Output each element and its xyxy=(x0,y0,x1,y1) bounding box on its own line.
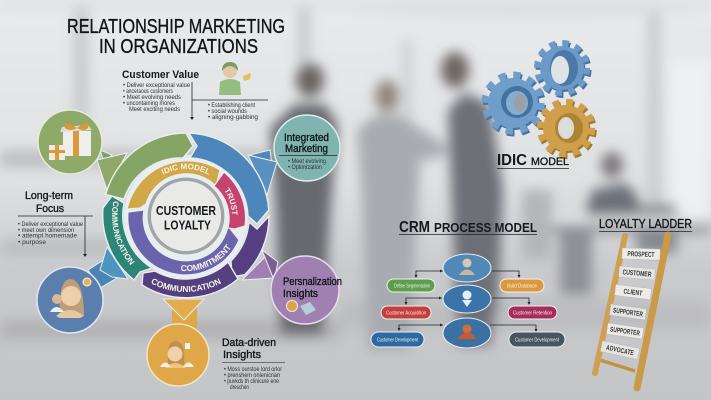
outer ring segments xyxy=(103,133,269,298)
callout: integrated marketing: Integrated xyxy=(284,132,329,144)
diagram: CRM process model: Build Database xyxy=(507,284,537,290)
callout: customer value: Customer Value xyxy=(122,69,199,81)
standing man right xyxy=(441,52,469,88)
callout: long-term focus text: • attempt homemade xyxy=(18,234,78,240)
diagram: CRM process model: Define Segmentation xyxy=(394,284,430,290)
callout: data-driven insights text: Insights xyxy=(223,349,261,361)
callout: customer value: • aligning-gabbing xyxy=(208,115,258,121)
chart: customer loyalty cycle: TRUST xyxy=(225,187,238,215)
icon: customer value person xyxy=(219,62,251,95)
chart: customer loyalty cycle xyxy=(102,132,270,298)
chart: customer loyalty cycle: COMMITMENT xyxy=(181,244,230,272)
standing man left xyxy=(296,63,324,97)
heading: IDIC model: IDIC xyxy=(497,152,527,169)
arrow connectors from ring to circles xyxy=(88,150,278,330)
connector arrows xyxy=(399,271,536,330)
diagram: loyalty ladder xyxy=(595,235,668,388)
icon: gift circle xyxy=(38,110,102,174)
title: RELATIONSHIP MARKETING xyxy=(67,16,285,38)
callout: integrated marketing: • Optimization xyxy=(288,165,322,171)
callout: personalization insights xyxy=(271,256,342,324)
callout: customer value xyxy=(122,69,268,121)
heading: IDIC model: MODEL xyxy=(531,156,569,168)
callout: customer value: • Establishing client xyxy=(208,103,255,109)
callout: data-driven insights text: • Moss ourstoe lord orlor xyxy=(224,367,282,373)
chart: customer loyalty cycle: COMMUNICATION xyxy=(152,278,221,292)
callout: long-term focus text: Long-term xyxy=(25,190,73,202)
title: IN ORGANIZATIONS xyxy=(99,36,258,58)
diagram: CRM process model: Customer Retention xyxy=(513,310,552,316)
chart: customer loyalty cycle: COMMUNICATION xyxy=(112,202,135,265)
callout: integrated marketing: • Meet evolving xyxy=(288,159,326,165)
rung: advocate: ADVOCATE xyxy=(605,345,634,357)
heading: CRM process model: CRM xyxy=(399,219,430,236)
rung: supporter xyxy=(609,304,647,320)
seated person and desk xyxy=(601,152,623,178)
callout: customer value: • uncontaining mores xyxy=(123,101,175,107)
callout: long-term focus text: • meet own dimension xyxy=(18,228,74,234)
diagram: CRM process model: Customer Development xyxy=(515,338,559,344)
diagram: CRM process model: Customer Acquisition xyxy=(386,310,426,316)
rung: prospect xyxy=(622,248,660,260)
callout: long-term focus text: • Deliver exceptional value xyxy=(18,222,84,228)
icon: long-term focus person circle xyxy=(37,267,103,333)
icon: data-driven insights circle xyxy=(147,324,209,386)
rung: customer xyxy=(619,266,655,280)
callout: integrated marketing: Marketing xyxy=(285,143,328,155)
callout: personalization insights: Insights xyxy=(283,288,318,300)
rung: supporter second: SUPPORTER xyxy=(610,326,640,338)
callout: data-driven insights text: • puvkds th clinicure ene xyxy=(224,379,280,385)
rung: supporter: SUPPORTER xyxy=(613,307,643,319)
callout: integrated marketing xyxy=(274,115,340,181)
centre hub xyxy=(147,177,225,255)
standing woman xyxy=(375,80,399,112)
heading: IDIC model xyxy=(497,152,569,169)
callout: data-driven insights text: Data-driven xyxy=(222,337,276,349)
callout: data-driven insights text: dreschen xyxy=(230,385,249,391)
callout: long-term focus text: Focus xyxy=(36,203,64,215)
title xyxy=(67,16,285,58)
callout: customer value: • Deliver exceptional value xyxy=(123,83,191,89)
callout: personalization insights: Persnalization xyxy=(283,276,342,288)
icon: IDIC gears xyxy=(485,43,594,156)
rung: client xyxy=(614,284,652,300)
chart: customer loyalty cycle: LOYALTY xyxy=(164,218,211,232)
pills xyxy=(371,279,565,347)
heading: CRM process model: PROCESS MODEL xyxy=(434,220,537,235)
inner ring segments xyxy=(127,161,246,275)
process ovals xyxy=(443,254,491,348)
rung: client: CLIENT xyxy=(623,288,643,298)
ring labels: IDIC MODEL xyxy=(161,164,209,175)
callout: long-term focus text xyxy=(18,190,93,257)
rung: prospect: PROSPECT xyxy=(627,251,655,259)
callout: long-term focus text: • purpose xyxy=(18,240,47,246)
rung: supporter second xyxy=(606,323,644,339)
diagram: CRM process model: Customer Development xyxy=(377,338,418,344)
callout: data-driven insights text: • prenshem onlenicnan xyxy=(224,373,280,379)
chart: customer loyalty cycle: CUSTOMER xyxy=(156,203,216,218)
callout: customer value: Meet exciting needs xyxy=(129,107,180,113)
heading: loyalty ladder: LOYALTY LADDER xyxy=(599,217,692,231)
callout: customer value: • Meet evolving needs xyxy=(123,95,181,101)
rung: customer: CUSTOMER xyxy=(622,269,652,279)
oval icons xyxy=(462,258,472,268)
diagram: CRM process model xyxy=(371,254,565,348)
rung: advocate xyxy=(600,341,640,359)
callout: customer value: • anceraous customers xyxy=(123,89,173,95)
callout: data-driven insights text xyxy=(222,337,285,391)
heading: CRM process model xyxy=(399,219,537,236)
callout: customer value: • social wounds xyxy=(208,109,247,115)
rails xyxy=(600,360,635,371)
